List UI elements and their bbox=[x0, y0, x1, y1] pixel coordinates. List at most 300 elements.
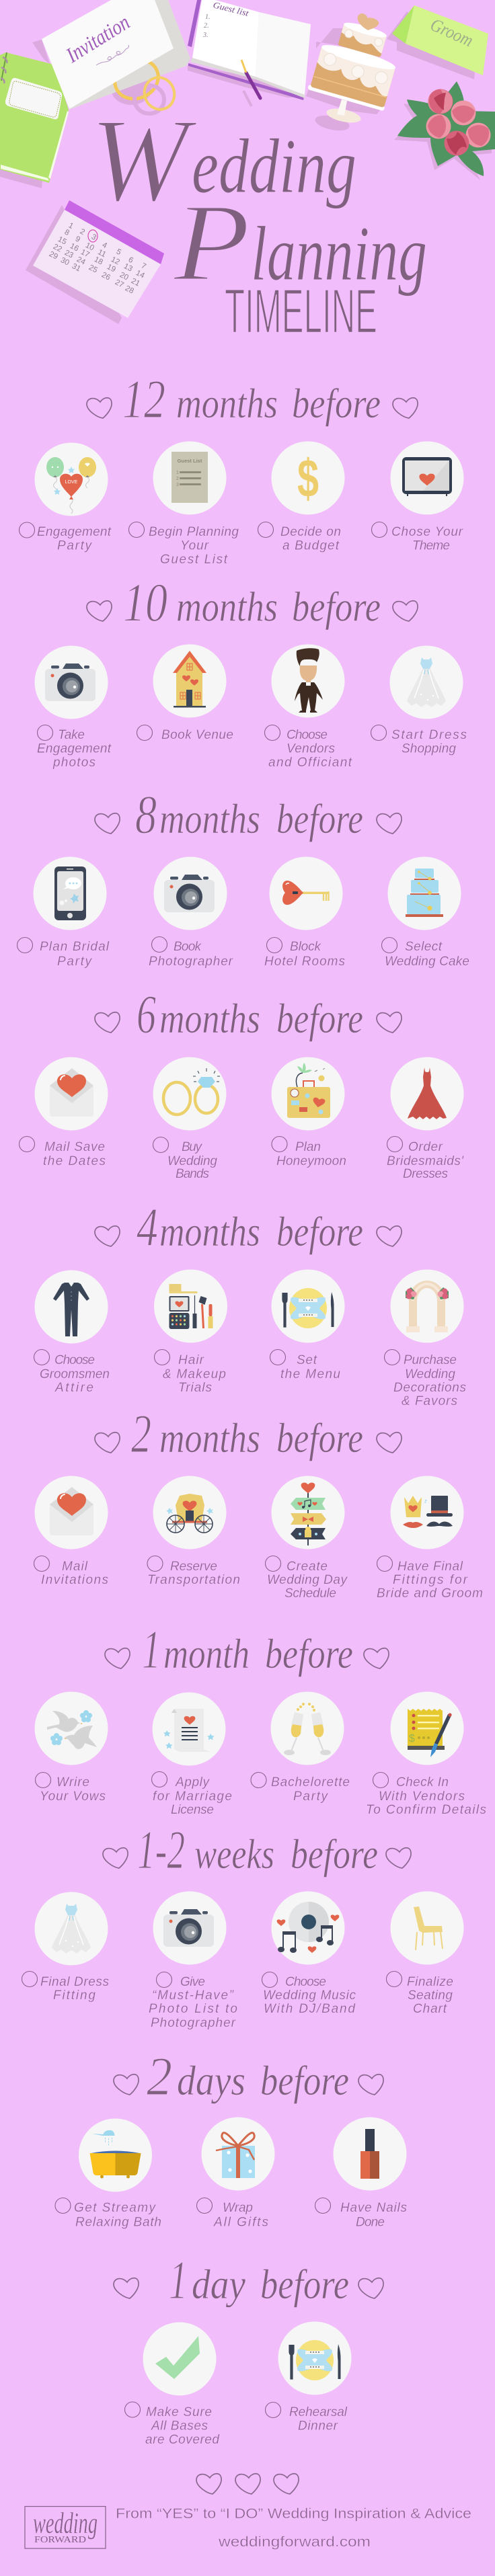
label: “Must-Have” bbox=[152, 1988, 235, 2003]
checkbox bbox=[270, 1350, 285, 1365]
task: Purchase Wedding Decorations & Favors bbox=[385, 1269, 467, 1408]
label: Wrap bbox=[223, 2201, 253, 2215]
icon: nail polish bbox=[334, 2118, 406, 2190]
task: Select Wedding Cake bbox=[382, 856, 469, 969]
illustration: calendar: 15 bbox=[56, 235, 68, 247]
icon: marriage licence bbox=[152, 1693, 226, 1765]
checkbox bbox=[17, 937, 32, 953]
label: All Gifts bbox=[213, 2216, 269, 2229]
illustration: calendar: 4 bbox=[101, 241, 108, 250]
label bbox=[267, 1560, 348, 1601]
checkbox bbox=[19, 522, 35, 538]
task: Plan Bridal Party bbox=[17, 856, 110, 969]
label bbox=[387, 1140, 464, 1181]
checkbox bbox=[147, 1556, 163, 1572]
heading: 12 months before: months bbox=[176, 381, 278, 427]
label: Have Nails bbox=[340, 2201, 408, 2215]
heading: 4 months before bbox=[95, 1197, 402, 1258]
label bbox=[37, 728, 112, 770]
illustration: invitation card: Invitation bbox=[61, 9, 134, 67]
illustration: calendar: 18 bbox=[93, 255, 104, 267]
label: Book Venue bbox=[161, 728, 233, 742]
label: Hotel Rooms bbox=[264, 955, 346, 969]
label: All Bases bbox=[151, 2419, 208, 2433]
label: Trials bbox=[178, 1381, 213, 1395]
task: Chose Your Theme bbox=[371, 441, 464, 553]
label: Block bbox=[290, 940, 321, 954]
label: Wedding bbox=[405, 1367, 455, 1381]
label: Attire bbox=[54, 1381, 93, 1395]
heading: 4 months before: 4 bbox=[137, 1197, 158, 1258]
heading: 6 months before: before bbox=[276, 996, 363, 1042]
heading: 1 month before bbox=[105, 1619, 389, 1680]
heading: 6 months before: 6 bbox=[137, 983, 156, 1045]
icon: phone bbox=[34, 856, 106, 930]
illustration: calendar: 16 bbox=[69, 242, 80, 253]
heading: 8 months before: 8 bbox=[135, 784, 157, 845]
illustration: calendar bbox=[26, 200, 164, 324]
checkbox bbox=[371, 725, 386, 741]
title: Planning bbox=[173, 181, 427, 304]
label: Mail bbox=[62, 1560, 88, 1574]
label: Vendors bbox=[287, 742, 335, 756]
title: Planning: P bbox=[173, 181, 250, 304]
label bbox=[40, 940, 110, 969]
heading: 1 month before: before bbox=[265, 1632, 353, 1677]
checkbox bbox=[387, 1136, 402, 1152]
task: Choose Wedding Music With DJ/Band bbox=[262, 1892, 356, 2016]
illustration: guest list book: 1. bbox=[205, 13, 210, 21]
task: Order Bridesmaids' Dresses bbox=[387, 1057, 464, 1181]
label: & Makeup bbox=[163, 1367, 226, 1381]
label: Book bbox=[174, 940, 202, 954]
label: Photo List to bbox=[149, 2002, 237, 2016]
checkbox bbox=[125, 2402, 140, 2417]
illustration: guest list book: Guest list bbox=[212, 0, 250, 18]
label bbox=[268, 728, 352, 770]
checkbox bbox=[156, 1972, 172, 1987]
illustration: calendar: 29 bbox=[48, 250, 59, 261]
heading: 2 days before: days bbox=[177, 2058, 245, 2104]
label: Apply bbox=[175, 1775, 210, 1789]
label: Fittings for bbox=[393, 1573, 468, 1587]
label: Your Vows bbox=[40, 1789, 106, 1804]
task: Begin Planning Your Guest List bbox=[129, 441, 239, 567]
icon: envelope with heart bbox=[35, 1476, 108, 1549]
icon: doves bbox=[35, 1691, 108, 1765]
label: Decide on bbox=[280, 525, 341, 539]
heading: 12 months before: before bbox=[292, 381, 381, 427]
icon: balloons: LOVE bbox=[65, 480, 78, 485]
heading: 1 month before: month bbox=[163, 1632, 250, 1677]
heading: 2 days before: before bbox=[260, 2058, 349, 2104]
illustration: calendar: 8 bbox=[63, 229, 71, 237]
illustration: calendar: 14 bbox=[135, 269, 146, 280]
label bbox=[393, 1353, 467, 1408]
label: Invitations bbox=[41, 1573, 109, 1587]
heading: 8 months before bbox=[95, 784, 402, 845]
illustration: calendar: 12 bbox=[110, 255, 121, 267]
label: Check In bbox=[396, 1775, 449, 1789]
icon: suitcase bbox=[272, 1057, 344, 1131]
illustration: calendar: 13 bbox=[122, 262, 134, 274]
heading: 1-2 weeks before: weeks bbox=[194, 1832, 274, 1878]
heading: 6 months before bbox=[95, 983, 402, 1045]
tagline: From “YES” to “I DO” Wedding Inspiration & Advice bbox=[116, 2506, 471, 2522]
illustration: notebook bbox=[0, 52, 69, 188]
illustration: calendar: 26 bbox=[100, 271, 112, 282]
checkbox bbox=[251, 1772, 266, 1788]
label: Shopping bbox=[402, 742, 456, 756]
icon: camera bbox=[153, 1892, 226, 1964]
task: Apply for Marriage License bbox=[152, 1693, 232, 1817]
checkbox bbox=[22, 1971, 38, 1987]
heading: 1 day before: 1 bbox=[169, 2249, 188, 2310]
illustration: guest list book: 2. bbox=[204, 22, 208, 30]
heading: 2 days before bbox=[114, 2046, 383, 2107]
three hearts bbox=[196, 2474, 299, 2494]
checkbox bbox=[272, 1136, 287, 1152]
task: Bachelorette Party bbox=[251, 1691, 350, 1804]
task: Have Nails Done bbox=[315, 2118, 408, 2229]
heading: 12 months before bbox=[87, 368, 418, 430]
icon: envelope with heart bbox=[35, 1057, 108, 1131]
illustration: calendar: 1 bbox=[67, 222, 75, 231]
label: Party bbox=[57, 955, 93, 969]
checkbox bbox=[385, 1350, 399, 1365]
illustration: guest list book: 3. bbox=[202, 32, 208, 39]
label: Done bbox=[356, 2216, 385, 2229]
heading: 1-2 weeks before: 1-2 bbox=[137, 1819, 185, 1880]
label: Plan bbox=[295, 1140, 321, 1154]
checkbox bbox=[382, 937, 397, 953]
label: Select bbox=[405, 940, 443, 954]
illustration: calendar: 30 bbox=[59, 256, 71, 268]
task: Rehearsal Dinner bbox=[265, 2322, 351, 2433]
task: Check In With Vendors To Confirm Details bbox=[366, 1691, 487, 1817]
illustration: calendar: 11 bbox=[96, 248, 107, 259]
label: Transportation bbox=[147, 1573, 240, 1587]
label: for Marriage bbox=[153, 1789, 232, 1804]
task: Book Photographer bbox=[149, 856, 233, 969]
label: Engagement bbox=[37, 742, 112, 756]
label bbox=[40, 1775, 106, 1804]
illustration: calendar: 6 bbox=[127, 256, 135, 265]
label: a Budget bbox=[282, 539, 340, 553]
label bbox=[40, 1353, 110, 1395]
heading: 2 months before: 2 bbox=[131, 1403, 151, 1464]
icon: wedding dress bbox=[390, 645, 463, 719]
icon: record and music notes bbox=[272, 1892, 344, 1964]
label bbox=[213, 2201, 269, 2229]
heading: 10 months before: months bbox=[176, 585, 278, 631]
checkbox bbox=[373, 1772, 389, 1788]
illustration: calendar: 23 bbox=[63, 249, 75, 260]
task: Set the Menu bbox=[270, 1269, 344, 1381]
label: Mail Save bbox=[44, 1140, 105, 1154]
checkbox bbox=[55, 2198, 71, 2213]
label: Decorations bbox=[393, 1381, 467, 1395]
label bbox=[43, 1140, 106, 1168]
label: Wedding Music bbox=[263, 1988, 356, 2003]
label: Bride and Groom bbox=[377, 1586, 483, 1601]
icon: place setting bbox=[278, 2322, 351, 2394]
icon: bathtub bbox=[79, 2119, 152, 2191]
label bbox=[37, 525, 112, 553]
label bbox=[407, 1975, 453, 2016]
task: Book Venue bbox=[137, 644, 233, 742]
task: Get Streamy Relaxing Bath bbox=[55, 2119, 161, 2229]
label: Give bbox=[180, 1975, 205, 1989]
task: Take Engagement photos bbox=[35, 645, 112, 770]
heading: 4 months before: months bbox=[159, 1209, 260, 1255]
label: Reserve bbox=[170, 1560, 217, 1574]
icon: dollar sign bbox=[272, 441, 344, 515]
label: Have Final bbox=[397, 1560, 463, 1574]
label bbox=[74, 2201, 161, 2229]
heading: 6 months before: months bbox=[159, 996, 260, 1042]
label: Chart bbox=[413, 2002, 447, 2016]
label bbox=[145, 2405, 220, 2447]
label bbox=[276, 1140, 346, 1168]
label: Make Sure bbox=[146, 2405, 212, 2419]
label: Guest List bbox=[160, 553, 228, 567]
illustration: calendar: 19 bbox=[106, 263, 117, 274]
task: Start Dress Shopping bbox=[371, 645, 467, 756]
checkbox bbox=[262, 1972, 277, 1987]
icon: checklist and pen bbox=[390, 1691, 464, 1765]
label: Create bbox=[287, 1560, 328, 1574]
task: Mail Save the Dates bbox=[19, 1057, 108, 1168]
illustration: guest list book bbox=[188, 0, 311, 106]
label: Party bbox=[293, 1789, 328, 1804]
checkbox bbox=[153, 1137, 168, 1152]
label bbox=[385, 940, 469, 969]
icon: wedding dress bbox=[35, 1892, 108, 1966]
label bbox=[377, 1560, 483, 1601]
label bbox=[40, 1975, 109, 2003]
checkbox bbox=[34, 1556, 50, 1572]
task: Wrire Your Vows bbox=[35, 1691, 108, 1804]
label bbox=[149, 1975, 237, 2030]
icon: camera bbox=[153, 856, 227, 930]
label: Take bbox=[58, 728, 85, 742]
label: Purchase bbox=[404, 1353, 457, 1367]
task: Finalize Seating Chart bbox=[386, 1892, 464, 2016]
checkbox bbox=[386, 1971, 402, 1987]
checkbox bbox=[266, 937, 282, 953]
label: Buy bbox=[182, 1140, 203, 1154]
checkbox bbox=[152, 937, 167, 952]
task: Engagement Party bbox=[19, 442, 112, 553]
label bbox=[149, 940, 233, 969]
icon: wedding rings bbox=[153, 1057, 226, 1131]
title: Wedding: edding bbox=[192, 124, 356, 210]
task: Choose Vendors and Officiant bbox=[265, 644, 352, 770]
illustration: rose bouquet bbox=[394, 81, 495, 180]
illustration: groom place card bbox=[387, 5, 488, 79]
label: Choose bbox=[54, 1353, 95, 1367]
icon: balloons bbox=[35, 442, 108, 516]
illustration: calendar: 3 bbox=[90, 233, 98, 242]
checkbox bbox=[155, 1350, 169, 1365]
label: Schedule bbox=[284, 1586, 336, 1601]
icon: guest list sheet bbox=[153, 441, 226, 515]
icon: makeup kit bbox=[154, 1269, 227, 1343]
task: Reserve Transportation bbox=[147, 1476, 240, 1587]
icon: floral arch bbox=[390, 1269, 464, 1343]
heading: 4 months before: before bbox=[276, 1209, 363, 1255]
logo: wedding forward bbox=[25, 2506, 106, 2548]
checkbox bbox=[196, 2198, 213, 2213]
label: are Covered bbox=[145, 2433, 220, 2447]
heading: 1 day before: day bbox=[192, 2262, 245, 2308]
label: Dinner bbox=[298, 2419, 338, 2433]
illustration: calendar: 10 bbox=[84, 241, 96, 253]
illustration: wedding cake bbox=[306, 13, 397, 133]
label bbox=[147, 1560, 240, 1587]
illustration: calendar: 9 bbox=[74, 235, 81, 244]
heading: 1-2 weeks before bbox=[103, 1819, 411, 1880]
task: Plan Honeymoon bbox=[272, 1057, 346, 1168]
icon: champagne flutes bbox=[270, 1691, 344, 1765]
checkbox bbox=[152, 1772, 167, 1787]
label: Wedding bbox=[167, 1154, 217, 1168]
illustration: calendar: 7 bbox=[140, 262, 147, 271]
icon: signpost bbox=[272, 1476, 344, 1549]
logo: wedding forward: FORWARD bbox=[34, 2535, 86, 2545]
checkbox bbox=[19, 1136, 35, 1152]
title: Wedding: W bbox=[90, 93, 198, 227]
icon: chair bbox=[390, 1892, 464, 1964]
task: Final Dress Fitting bbox=[22, 1892, 109, 2003]
label: With Vendors bbox=[379, 1789, 465, 1804]
heading: 12 months before: 12 bbox=[122, 368, 165, 430]
checkbox bbox=[137, 725, 152, 741]
label bbox=[366, 1775, 487, 1817]
label: Dresses bbox=[403, 1167, 448, 1181]
heading: 10 months before bbox=[87, 572, 418, 633]
label: Bachelorette bbox=[271, 1775, 350, 1789]
label bbox=[340, 2201, 408, 2229]
label: Theme bbox=[412, 539, 450, 553]
heading: 1 day before bbox=[114, 2249, 383, 2310]
illustration: calendar: 24 bbox=[75, 255, 87, 267]
label: the Menu bbox=[280, 1367, 340, 1381]
checkbox bbox=[371, 522, 387, 538]
task: Wrap All Gifts bbox=[196, 2118, 274, 2229]
illustration: calendar: 21 bbox=[130, 277, 141, 288]
icon: place setting bbox=[272, 1269, 344, 1343]
icon: guest list sheet: Guest List bbox=[178, 458, 202, 464]
label bbox=[264, 940, 346, 969]
heading: 2 months before: months bbox=[159, 1416, 260, 1461]
title: Planning: lanning bbox=[251, 211, 427, 297]
icon: blue tiered cake bbox=[387, 856, 461, 930]
icon: heart key bbox=[269, 856, 343, 930]
illustration: calendar: 17 bbox=[79, 248, 91, 259]
label: Hair bbox=[178, 1353, 204, 1367]
label bbox=[271, 1775, 350, 1804]
heading: 1 month before: 1 bbox=[142, 1619, 161, 1680]
label: Relaxing Bath bbox=[75, 2216, 161, 2229]
checkbox bbox=[35, 1772, 51, 1788]
label bbox=[391, 525, 463, 553]
label bbox=[153, 1775, 232, 1817]
label: Plan Bridal bbox=[40, 940, 110, 954]
label: Choose bbox=[287, 728, 328, 742]
illustration: calendar: 20 bbox=[118, 271, 130, 282]
label: Chose Your bbox=[391, 525, 463, 539]
illustration: calendar: 28 bbox=[124, 284, 135, 296]
label: Rehearsal bbox=[289, 2405, 348, 2419]
task: Block Hotel Rooms bbox=[264, 856, 346, 969]
label bbox=[280, 1353, 340, 1381]
task: Hair & Makeup Trials bbox=[154, 1269, 227, 1395]
label: With DJ/Band bbox=[264, 2002, 356, 2016]
label: Honeymoon bbox=[276, 1154, 346, 1168]
checkbox bbox=[34, 1350, 50, 1365]
task: Mail Invitations bbox=[34, 1476, 109, 1587]
label bbox=[149, 525, 239, 567]
label: To Confirm Details bbox=[366, 1803, 487, 1817]
label: Begin Planning bbox=[149, 525, 239, 539]
label: Bands bbox=[176, 1167, 210, 1181]
checkbox bbox=[377, 1556, 393, 1572]
checkbox bbox=[265, 2403, 281, 2417]
illustration: calendar: 25 bbox=[87, 264, 99, 275]
task: Make Sure All Bases are Covered bbox=[125, 2322, 220, 2447]
label: and Officiant bbox=[268, 756, 352, 770]
label: Get Streamy bbox=[74, 2201, 156, 2215]
checkbox bbox=[265, 1556, 281, 1572]
task: Buy Wedding Bands bbox=[153, 1057, 226, 1181]
label bbox=[280, 525, 341, 553]
label bbox=[391, 728, 467, 756]
label: photos bbox=[52, 756, 96, 770]
checkbox bbox=[129, 522, 144, 538]
heading: 10 months before: 10 bbox=[123, 572, 167, 633]
label: Bridesmaids' bbox=[387, 1154, 464, 1168]
label: Your bbox=[180, 539, 209, 553]
icon: crown, top hat, lips, moustache bbox=[390, 1476, 464, 1549]
label: the Dates bbox=[43, 1154, 106, 1168]
icon: officiant bbox=[272, 644, 344, 718]
label: Start Dress bbox=[391, 728, 467, 742]
checkbox bbox=[38, 725, 52, 741]
illustration: calendar: 27 bbox=[114, 278, 125, 290]
checkbox bbox=[258, 522, 273, 538]
label: Set bbox=[297, 1353, 317, 1367]
label: Wedding Day bbox=[267, 1573, 348, 1587]
label: Final Dress bbox=[40, 1975, 109, 1989]
label bbox=[167, 1140, 217, 1181]
heading: 1 day before: before bbox=[260, 2262, 349, 2308]
checkbox bbox=[315, 2198, 331, 2213]
label bbox=[289, 2405, 348, 2433]
task: Decide on a Budget bbox=[258, 441, 344, 553]
label: Order bbox=[408, 1140, 443, 1154]
heading: 2 months before bbox=[95, 1403, 402, 1464]
icon: red dress bbox=[390, 1057, 464, 1131]
heading: 2 days before: 2 bbox=[147, 2046, 172, 2107]
label: Finalize bbox=[407, 1975, 453, 1989]
icon: checklist and pen: $ bbox=[409, 1733, 415, 1744]
icon: camera bbox=[35, 645, 108, 719]
website: weddingforward.com bbox=[218, 2534, 371, 2550]
label: Fitting bbox=[53, 1988, 96, 2003]
icon: dollar sign: $ bbox=[297, 448, 319, 508]
